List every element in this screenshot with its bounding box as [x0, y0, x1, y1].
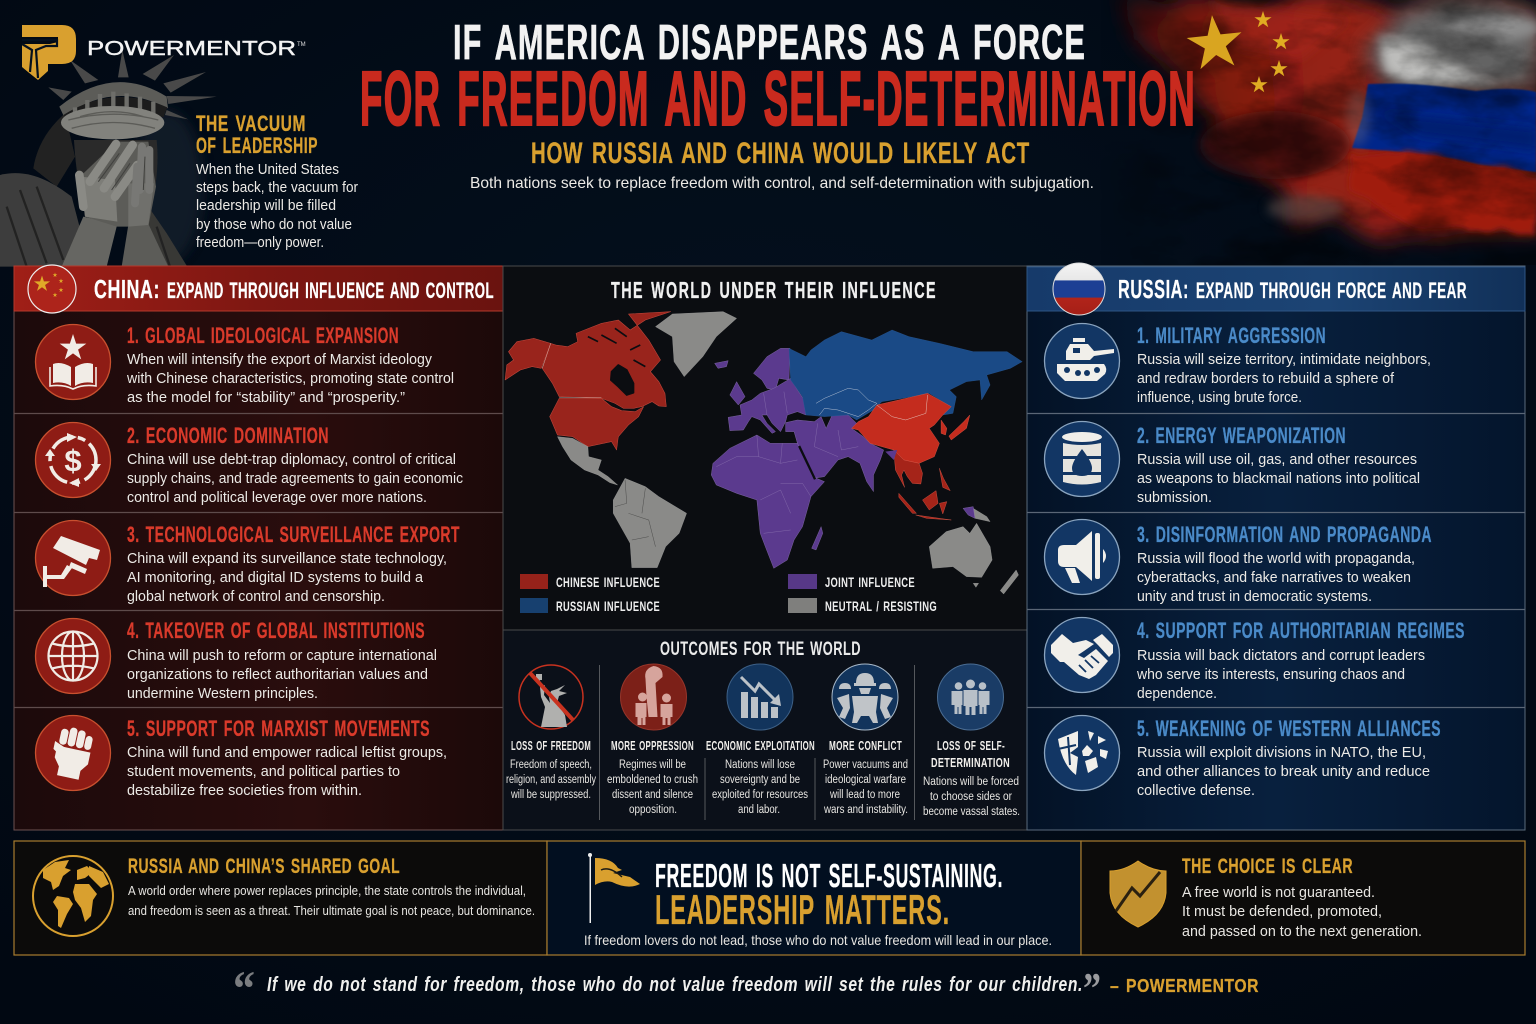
icon: shattered shield: [1044, 716, 1120, 790]
panel: shared goal: and freedom is seen as a threat. Their ultimate goal is not peace, but dominance.: [128, 903, 535, 918]
Russia item 4: support for authoritarian regimes: [1044, 618, 1465, 702]
panel: the choice is clear: A free world is not guaranteed.: [1182, 884, 1375, 901]
China item 1: global ideological expansion: [36, 323, 454, 406]
outcome: economic exploitation: Nations will lose: [725, 759, 795, 771]
China item 2: economic domination: China will use debt-trap diplomacy, control of critical: [127, 452, 456, 468]
China item 3: technological surveillance export: [36, 520, 460, 605]
Russia item 4: support for authoritarian regimes: dependence.: [1137, 686, 1217, 702]
icon: dollar cycle: $: [64, 443, 82, 478]
icon: globe: [36, 618, 110, 694]
outcome: economic exploitation: sovereignty and be: [720, 774, 800, 786]
icon: fist over family: [620, 664, 686, 730]
panel: outcomes for the world: [503, 630, 1027, 830]
icon: tank: [1044, 324, 1120, 398]
map: [505, 312, 1022, 594]
outcome: more oppression: MORE OPPRESSION: [611, 739, 694, 753]
text block: the vacuum of leadership: [196, 111, 358, 251]
China item 4: takeover of global institutions: China will push to reform or capture international: [127, 648, 437, 664]
legend: neutral / resisting: [788, 598, 937, 614]
Russia item 5: weakening of western alliances: collective defense.: [1137, 783, 1255, 799]
outcome: loss of self-determination: Nations will be forced: [923, 776, 1019, 788]
Russia item 5: weakening of western alliances: [1044, 716, 1441, 799]
outcome: loss of self-determination: [923, 664, 1020, 818]
Russia item 1: military aggression: [1044, 323, 1431, 406]
panel: Russia: [1027, 263, 1525, 830]
outcome: more conflict: ideological warfare: [825, 774, 906, 786]
icon: falling chart: [727, 664, 793, 730]
image: Statue of Liberty covering her face: [0, 50, 217, 267]
title: Both nations seek to replace freedom with control, and self-determination with subjugation.: [470, 175, 1094, 192]
panel: the choice is clear: and passed on to the next generation.: [1182, 923, 1422, 940]
heading: the world under their influence: THE WORLD UNDER THEIR INFLUENCE: [611, 277, 937, 303]
China item 1: global ideological expansion: 1. GLOBAL IDEOLOGICAL EXPANSION: [127, 323, 399, 348]
Russia item 1: military aggression: 1. MILITARY AGGRESSION: [1137, 323, 1326, 348]
Russia item 5: weakening of western alliances: and other alliances to break unity and reduce: [1137, 764, 1430, 780]
panel: world map: [503, 266, 1027, 630]
legend: russian influence: RUSSIAN INFLUENCE: [556, 599, 660, 614]
outcome: loss of freedom: religion, and assembly: [506, 774, 596, 786]
Russia item 2: energy weaponization: [1044, 422, 1420, 506]
text block: the vacuum of leadership: steps back, the vacuum for: [196, 180, 358, 196]
Russia item 1: military aggression: Russia will seize territory, intimidate neighbors,: [1137, 352, 1431, 368]
outcome: loss of freedom: LOSS OF FREEDOM: [511, 739, 591, 753]
outcome: more oppression: [607, 664, 698, 816]
text block: the vacuum of leadership: When the United States: [196, 162, 339, 178]
icon: surveillance camera: [36, 520, 110, 596]
icon: star and book: [36, 324, 110, 400]
icon: soldiers: [832, 664, 898, 730]
outcome: loss of self-determination: DETERMINATION: [931, 756, 1010, 770]
outcome: more oppression: dissent and silence: [612, 789, 693, 801]
legend: joint influence: [788, 574, 915, 590]
Russia item 4: support for authoritarian regimes: Russia will back dictators and corrupt leaders: [1137, 648, 1425, 664]
panel: the choice is clear: [1081, 841, 1525, 955]
China item 3: technological surveillance export: AI monitoring, and digital ID systems to build a: [127, 570, 424, 586]
legend: neutral / resisting: NEUTRAL / RESISTING: [825, 599, 937, 614]
icon: megaphone: [1044, 520, 1120, 594]
China item 2: economic domination: supply chains, and trade agreements to gain economic: [127, 471, 463, 487]
China item 1: global ideological expansion: as the model for “stability” and “prosperity.”: [127, 390, 405, 406]
China header: EXPAND THROUGH INFLUENCE AND CONTROL: [167, 278, 494, 303]
outcome: more conflict: wars and instability.: [823, 804, 908, 816]
outcome: loss of self-determination: to choose sides or: [930, 791, 1012, 803]
outcome: economic exploitation: exploited for resources: [712, 789, 808, 801]
Russia item 1: military aggression: and redraw borders to rebuild a sphere of: [1137, 371, 1395, 387]
icon: handshake: [1044, 618, 1120, 692]
legend: chinese influence: CHINESE INFLUENCE: [556, 575, 660, 590]
China item 4: takeover of global institutions: organizations to reflect authoritarian values and: [127, 667, 428, 683]
China item 3: technological surveillance export: global network of control and censorship.: [127, 589, 385, 605]
Russia item 2: energy weaponization: 2. ENERGY WEAPONIZATION: [1137, 423, 1346, 448]
China item 5: support for Marxist movements: 5. SUPPORT FOR MARXIST MOVEMENTS: [127, 716, 430, 741]
China item 4: takeover of global institutions: 4. TAKEOVER OF GLOBAL INSTITUTIONS: [127, 618, 425, 643]
outcome: more conflict: Power vacuums and: [823, 759, 908, 771]
quote: If we do not stand for freedom, those who do not value freedom will set the rules for our children.: [267, 974, 1083, 996]
China item 5: support for Marxist movements: [36, 716, 447, 799]
title: HOW RUSSIA AND CHINA WOULD LIKELY ACT: [531, 137, 1030, 170]
outcome: more conflict: [823, 664, 908, 816]
heading: outcomes: OUTCOMES FOR THE WORLD: [660, 639, 861, 660]
text block: the vacuum of leadership: THE VACUUM: [196, 111, 306, 136]
China item 3: technological surveillance export: China will expand its surveillance state technology,: [127, 551, 447, 567]
text block: the vacuum of leadership: OF LEADERSHIP: [196, 133, 318, 158]
icon: three people: [938, 664, 1004, 730]
panel: shared goal: [14, 841, 547, 955]
text block: the vacuum of leadership: leadership will be filled: [196, 198, 336, 214]
panel: leadership matters: FREEDOM IS NOT SELF-SUSTAINING.: [655, 857, 1003, 894]
outcome: more oppression: emboldened to crush: [607, 774, 698, 786]
Russia item 3: disinformation and propaganda: unity and trust in democratic systems.: [1137, 589, 1372, 605]
China item 2: economic domination: control and political leverage over more nations.: [127, 490, 427, 506]
China item 5: support for Marxist movements: destabilize free societies from within.: [127, 783, 362, 799]
outcome: loss of freedom: Freedom of speech,: [510, 759, 592, 771]
logo: Powermentor: [22, 25, 306, 80]
quote: [233, 960, 1259, 1016]
panel: shared goal: A world order where power replaces principle, the state controls the individual,: [128, 883, 526, 898]
China item 3: technological surveillance export: 3. TECHNOLOGICAL SURVEILLANCE EXPORT: [127, 522, 460, 547]
Russia header: RUSSIA:: [1118, 274, 1189, 304]
panel: leadership matters: If freedom lovers do not lead, those who do not value freedom will lead in our place.: [584, 932, 1052, 948]
panel: leadership matters: [547, 841, 1081, 955]
icon: shield: [1110, 861, 1166, 927]
opening quotation mark: “: [233, 960, 255, 1016]
icon: crossed-out statue: [519, 665, 583, 729]
Russia item 2: energy weaponization: as weapons to blackmail nations into political: [1137, 471, 1420, 487]
Russia item 2: energy weaponization: submission.: [1137, 490, 1212, 506]
outcome: economic exploitation: and labor.: [738, 804, 780, 816]
text block: the vacuum of leadership: by those who do not value: [196, 217, 352, 233]
legend: russian influence: [520, 598, 660, 614]
Russia item 3: disinformation and propaganda: Russia will flood the world with propaganda,: [1137, 551, 1415, 567]
panel: leadership matters: LEADERSHIP MATTERS.: [655, 886, 950, 933]
China item 2: economic domination: 2. ECONOMIC DOMINATION: [127, 423, 329, 448]
China item 5: support for Marxist movements: student movements, and political parties to: [127, 764, 400, 780]
legend: joint influence: JOINT INFLUENCE: [825, 575, 915, 590]
panel: China: [14, 265, 503, 830]
outcome: more oppression: opposition.: [629, 804, 677, 816]
outcome: economic exploitation: ECONOMIC EXPLOITATION: [706, 739, 815, 753]
outcome: loss of self-determination: become vassal states.: [923, 806, 1020, 818]
Russia item 5: weakening of western alliances: Russia will exploit divisions in NATO, the EU,: [1137, 745, 1426, 761]
panel: the choice is clear: It must be defended, promoted,: [1182, 903, 1382, 920]
China item 4: takeover of global institutions: undermine Western principles.: [127, 686, 318, 702]
panel: shared goal: RUSSIA AND CHINA’S SHARED GOAL: [128, 855, 400, 878]
panel: the choice is clear: THE CHOICE IS CLEAR: [1182, 855, 1353, 878]
logo wordmark: POWERMENTOR: [87, 38, 296, 60]
Russia item 3: disinformation and propaganda: cyberattacks, and fake narratives to weaken: [1137, 570, 1411, 586]
icon: raised fist: [36, 716, 110, 790]
icon: flag: [588, 853, 640, 923]
Russia item 1: military aggression: influence, using brute force.: [1137, 390, 1302, 406]
Russia item 2: energy weaponization: Russia will use oil, gas, and other resources: [1137, 452, 1417, 468]
outcome: more oppression: Regimes will be: [619, 759, 686, 771]
logo: Powermentor: TM: [297, 42, 306, 48]
closing quotation mark: ”: [1083, 964, 1101, 1013]
China item 1: global ideological expansion: with Chinese characteristics, promoting state control: [126, 371, 454, 387]
outcome: more conflict: will lead to more: [829, 789, 900, 801]
icon: dollar cycle: [36, 422, 110, 498]
legend: chinese influence: [520, 574, 660, 590]
outcome: more conflict: MORE CONFLICT: [829, 739, 902, 753]
outcome: economic exploitation: [706, 664, 815, 816]
text block: the vacuum of leadership: freedom—only power.: [196, 235, 324, 251]
logo mark: [22, 25, 76, 80]
China item 5: support for Marxist movements: China will fund and empower radical leftist groups,: [127, 745, 447, 761]
China item 2: economic domination: [36, 422, 463, 506]
background flags: China and Russia: [1100, 0, 1536, 265]
icon: gold globe: [33, 856, 113, 936]
China item 1: global ideological expansion: When will intensify the export of Marxist ideology: [127, 352, 433, 368]
Russia item 3: disinformation and propaganda: [1044, 520, 1432, 605]
outcome: loss of self-determination: LOSS OF SELF-: [937, 739, 1005, 753]
icon: oil barrel: [1044, 422, 1120, 496]
outcome: loss of freedom: will be suppressed.: [510, 789, 591, 801]
China header: [14, 265, 503, 313]
China item 4: takeover of global institutions: [36, 618, 437, 702]
quote: – POWERMENTOR: [1110, 976, 1259, 996]
title: IF AMERICA DISAPPEARS AS A FORCE: [453, 16, 1086, 70]
title: [360, 16, 1196, 192]
outcome: loss of freedom: [506, 665, 596, 801]
China header: CHINA:: [94, 274, 160, 304]
Russia header: [1027, 263, 1525, 315]
Russia item 4: support for authoritarian regimes: who serve its interests, ensuring chaos and: [1136, 667, 1405, 683]
